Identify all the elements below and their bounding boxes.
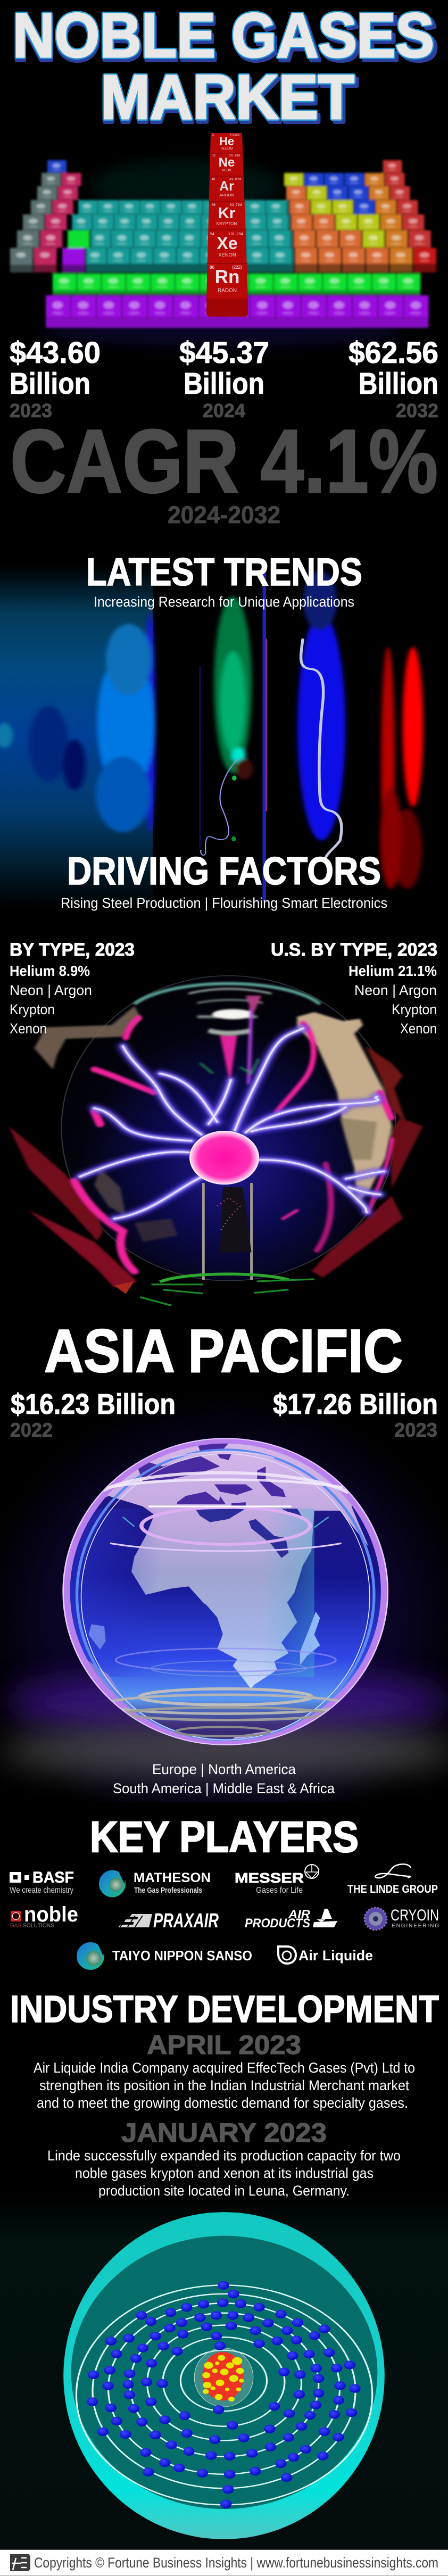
footer bar <box>0 2549 448 2576</box>
element Rn: RADON <box>218 288 237 294</box>
logo: Matheson: MATHESON <box>134 1870 211 1885</box>
other regions: Europe | North America <box>152 1761 296 1777</box>
statistic 2023: 2023 <box>10 400 52 421</box>
logo: Praxair: PRAXAIR <box>153 1910 219 1932</box>
globe <box>57 1433 400 1746</box>
by type 2023: Xenon <box>10 1021 47 1037</box>
element Ar <box>212 178 241 197</box>
development January 2023: JANUARY 2023 <box>121 2118 327 2148</box>
statistic 2024: $45.37 <box>179 336 269 370</box>
development January 2023: Linde successfully expanded its production capacity for two <box>47 2148 401 2164</box>
statistic 2023 <box>10 336 101 421</box>
element Ar: 39.948 <box>229 178 241 181</box>
element Rn: 86 <box>210 265 214 270</box>
logo: Air Liquide: Air Liquide <box>298 1948 373 1964</box>
statistic Asia Pacific 2023: 2023 <box>394 1419 437 1441</box>
noble gases column <box>206 133 248 317</box>
icon: Fortune Business Insights logo <box>10 2554 30 2571</box>
element He: He <box>219 135 234 148</box>
electron shells <box>76 2285 372 2505</box>
element Ne: 10 <box>212 154 215 158</box>
CAGR figure: 2024-2032 <box>168 501 280 528</box>
element Kr: 83.798 <box>230 204 243 207</box>
element He <box>212 134 239 151</box>
logo: BASF <box>10 1869 74 1895</box>
element Kr: KRYPTON <box>217 221 237 226</box>
heading: Asia Pacific: ASIA PACIFIC <box>44 1318 403 1385</box>
electrons <box>87 2281 361 2508</box>
logo: Messer <box>235 1865 319 1895</box>
other regions <box>113 1761 335 1796</box>
element Xe: XENON <box>218 252 236 258</box>
statistic 2032: $62.56 <box>349 336 438 370</box>
development January 2023: noble gases krypton and xenon at its industrial gas <box>75 2165 374 2181</box>
logo: Matheson <box>99 1870 211 1898</box>
logo: The Linde Group: THE LINDE GROUP <box>347 1883 438 1895</box>
heading: driving factors: DRIVING FACTORS <box>67 850 381 893</box>
development April 2023: Air Liquide India Company acquired EffecTech Gases (Pvt) Ltd to <box>34 2060 415 2076</box>
logo: Air Products <box>245 1908 337 1931</box>
statistic 2032 <box>349 336 438 421</box>
logo: Noble Gas Solutions <box>10 1903 78 1929</box>
development April 2023: and to meet the growing domestic demand for specialty gases. <box>37 2095 408 2111</box>
logo: Taiyo Nippon Sanso <box>77 1942 252 1970</box>
logo: Matheson: The Gas Professionals <box>134 1886 202 1895</box>
by type 2023: Neon | Argon <box>10 982 92 998</box>
hands around the globe <box>9 1006 423 1288</box>
element Ne: 20.180 <box>229 154 240 158</box>
logo: The Linde Group <box>347 1864 438 1895</box>
U.S. by type 2023: U.S. BY TYPE, 2023 <box>271 940 437 960</box>
image: glowing globe background <box>0 1409 448 1802</box>
element Rn <box>210 265 242 294</box>
U.S. by type 2023: Neon | Argon <box>354 982 437 998</box>
image: atom model <box>0 2198 448 2550</box>
plasma streamers <box>80 1028 384 1219</box>
logo: Noble Gas Solutions: GAS <box>10 1923 21 1929</box>
element He: HELIUM <box>221 147 233 151</box>
U.S. by type 2023 <box>271 940 437 1037</box>
element Ne: NEON <box>222 169 231 172</box>
logo: Messer: MESSER <box>235 1870 304 1886</box>
statistic Asia Pacific 2022: 2022 <box>10 1419 53 1441</box>
logo: Air Products: AIR <box>288 1908 310 1921</box>
element Xe <box>210 233 243 258</box>
other regions: South America | Middle East & Africa <box>113 1780 335 1796</box>
driving factors text: Rising Steel Production | Flourishing Smart Electronics <box>61 895 387 911</box>
trend text: Increasing Research for Unique Applications <box>94 594 354 610</box>
central electrode orb <box>189 1131 259 1185</box>
element Ne: Ne <box>219 155 235 170</box>
image: plasma ball <box>9 976 423 1305</box>
element Kr: 36 <box>212 204 215 207</box>
element Xe: Xe <box>217 234 238 253</box>
base <box>160 1274 288 1282</box>
element Kr <box>212 204 243 226</box>
element Rn: Rn <box>215 267 239 287</box>
statistic 2024: 2024 <box>203 400 245 421</box>
title <box>13 1 438 136</box>
nucleus <box>194 2348 253 2407</box>
U.S. by type 2023: Helium 21.1% <box>349 963 437 979</box>
title: MARKET <box>101 62 354 132</box>
title: MARKET <box>101 62 354 132</box>
statistic 2023: Billion <box>10 367 90 401</box>
periodic table illustration <box>10 133 437 346</box>
dark seas <box>137 1443 303 1558</box>
logo: BASF: BASF <box>32 1869 74 1886</box>
stem <box>203 1183 252 1280</box>
element Ne <box>212 154 240 172</box>
logo: Cryoin Engineering <box>364 1907 439 1930</box>
image: coloured gas discharge tubes <box>0 566 423 908</box>
statistic 2032: 2032 <box>396 400 438 421</box>
statistic 2024 <box>179 336 269 421</box>
logo: Taiyo Nippon Sanso: TAIYO NIPPON SANSO <box>112 1948 252 1964</box>
logo: Noble Gas Solutions: SOLUTIONS <box>23 1923 54 1929</box>
logo: Noble Gas Solutions: noble <box>24 1903 78 1926</box>
development January 2023: production site located in Leuna, Germany. <box>98 2183 350 2199</box>
element Ar: 18 <box>212 178 215 181</box>
element Xe: 131.294 <box>228 233 243 236</box>
element He: 2 <box>212 134 214 137</box>
element Ar: Ar <box>219 179 234 194</box>
heading: latest trends: LATEST TRENDS <box>86 551 362 594</box>
logo: Messer: Gases for Life <box>256 1886 303 1895</box>
statistic Asia Pacific 2023 <box>273 1388 438 1441</box>
by type 2023 <box>10 940 135 1037</box>
statistic Asia Pacific 2022 <box>10 1388 176 1441</box>
continents <box>70 1438 369 1743</box>
statistic Asia Pacific 2022: $16.23 Billion <box>11 1388 176 1420</box>
U.S. by type 2023: Xenon <box>400 1021 437 1037</box>
heading: key players: KEY PLAYERS <box>90 1813 359 1861</box>
logo: Praxair <box>118 1910 219 1932</box>
globe light rings <box>67 1441 384 1742</box>
element He: 4.0026 <box>230 134 239 137</box>
U.S. by type 2023: Krypton <box>392 1001 437 1017</box>
element Kr: Kr <box>218 205 235 222</box>
statistic 2023: $43.60 <box>10 336 101 370</box>
element Rn: (222) <box>232 265 242 270</box>
development April 2023 <box>34 2030 415 2111</box>
element Ar: ARGON <box>219 193 234 197</box>
logo: Cryoin Engineering: ENGINEERING <box>392 1923 439 1929</box>
logo: Air Products: PRODUCTS <box>245 1916 310 1931</box>
by type 2023: BY TYPE, 2023 <box>10 940 135 960</box>
by type 2023: Helium 8.9% <box>10 963 90 979</box>
globe top electrode <box>134 983 320 1084</box>
title: MARKET <box>101 65 358 136</box>
logo: BASF: We create chemistry <box>10 1886 73 1895</box>
statistic 2024: Billion <box>184 367 264 401</box>
development April 2023: APRIL 2023 <box>147 2030 301 2060</box>
development April 2023: strengthen its position in the Indian Industrial Merchant market <box>39 2077 409 2093</box>
element Xe: 54 <box>210 233 214 236</box>
pink edge glow <box>74 1018 392 1271</box>
by type 2023: Krypton <box>10 1001 55 1017</box>
development January 2023 <box>47 2118 401 2199</box>
plasma globe sphere <box>61 976 396 1281</box>
